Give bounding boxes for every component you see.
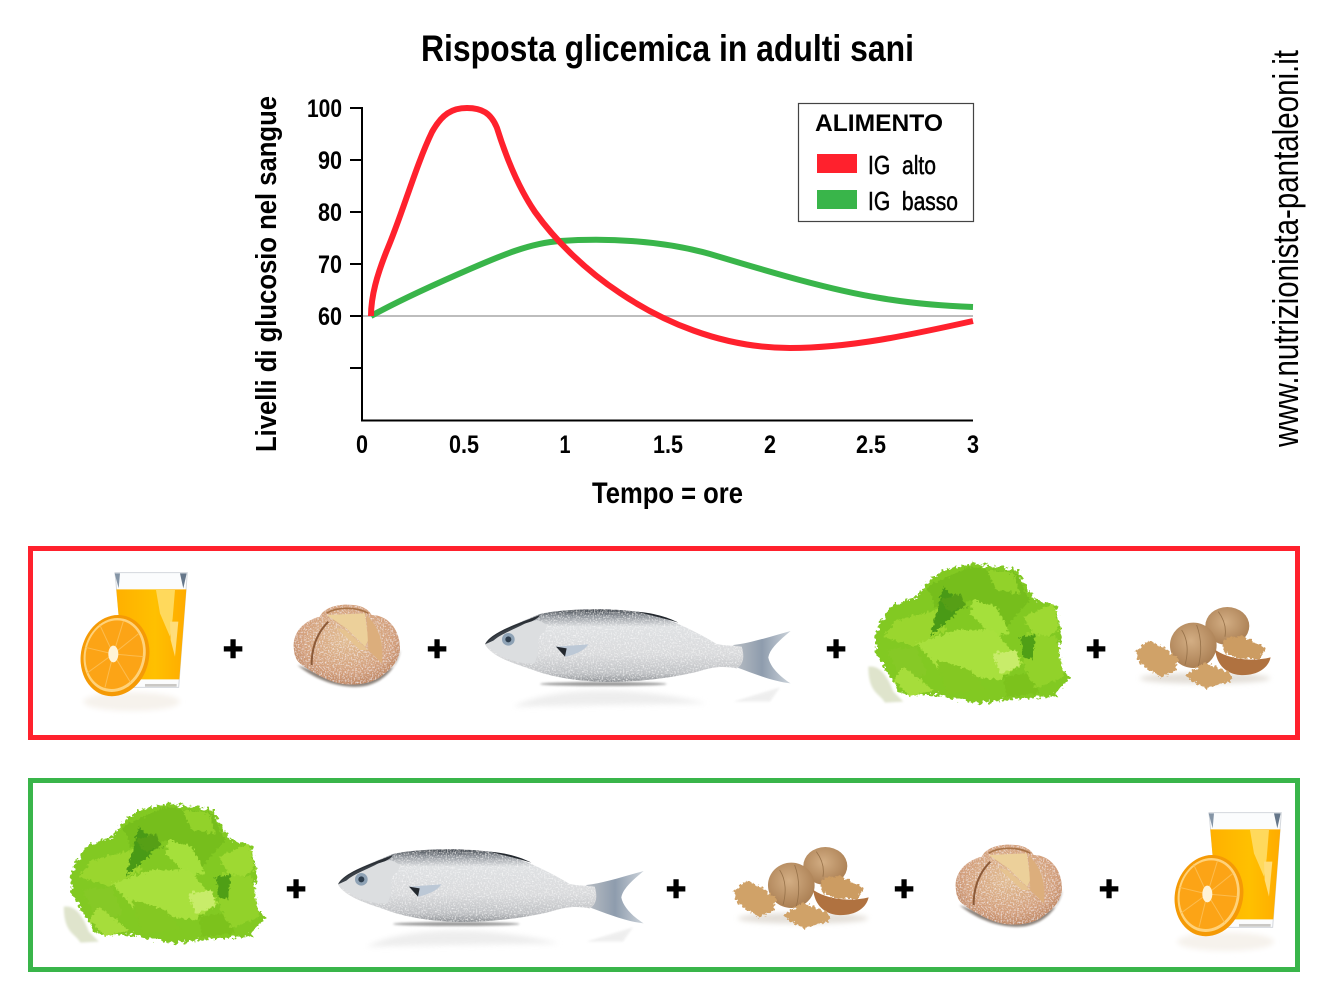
icon: bread (956, 845, 1063, 927)
y axis tick labels: 70 (318, 251, 342, 279)
x axis tick labels: 0 (356, 431, 368, 459)
y axis tick labels: 80 (318, 199, 342, 227)
plus sign: + (1086, 630, 1106, 668)
y axis tick labels: 100 (307, 95, 342, 123)
icon: orange juice (1166, 813, 1281, 951)
icon: orange juice (72, 573, 187, 711)
plus sign: + (286, 870, 306, 908)
x axis tick labels: 1.5 (653, 431, 683, 459)
axes with ticks (350, 107, 973, 420)
panel: high GI meal order (30, 548, 1298, 738)
x axis tick labels: 3 (967, 431, 979, 459)
icon: lettuce (868, 563, 1070, 703)
y axis tick labels: 60 (318, 303, 342, 331)
x axis tick labels: 0.5 (449, 431, 479, 459)
plus sign: + (826, 630, 846, 668)
line chart: blood glucose response (251, 95, 979, 510)
y axis tick labels (307, 95, 342, 331)
x axis tick labels: 2 (764, 431, 776, 459)
x axis tick labels (356, 431, 979, 459)
legend (798, 104, 974, 222)
red curve: high GI (371, 108, 973, 348)
title: Risposta glicemica in adulti sani (421, 28, 914, 69)
legend swatch: low GI (817, 190, 857, 209)
legend label: high GI: IG alto (868, 150, 936, 180)
green curve: low GI (371, 240, 973, 316)
y axis title: Livelli di glucosio nel sangue (251, 96, 283, 452)
plus sign: + (1099, 870, 1119, 908)
plus sign: + (427, 630, 447, 668)
legend heading: ALIMENTO (815, 110, 943, 137)
x axis tick labels: 1 (560, 431, 571, 459)
y axis tick labels: 90 (318, 147, 342, 175)
plus sign: + (666, 870, 686, 908)
legend label: low GI: IG basso (868, 186, 958, 216)
icon: walnuts (735, 847, 869, 928)
plus sign: + (894, 870, 914, 908)
x axis title: Tempo = ore (592, 477, 743, 510)
icon: bread (294, 605, 401, 687)
baseline at 60 (362, 315, 973, 317)
icon: fish (338, 849, 644, 947)
x axis tick labels: 2.5 (856, 431, 886, 459)
icon: walnuts (1137, 607, 1271, 688)
icon: fish (485, 609, 791, 707)
plus sign: + (223, 630, 243, 668)
panel: low GI meal order (30, 780, 1298, 970)
legend swatch: high GI (817, 154, 857, 173)
icon: lettuce (64, 803, 265, 943)
